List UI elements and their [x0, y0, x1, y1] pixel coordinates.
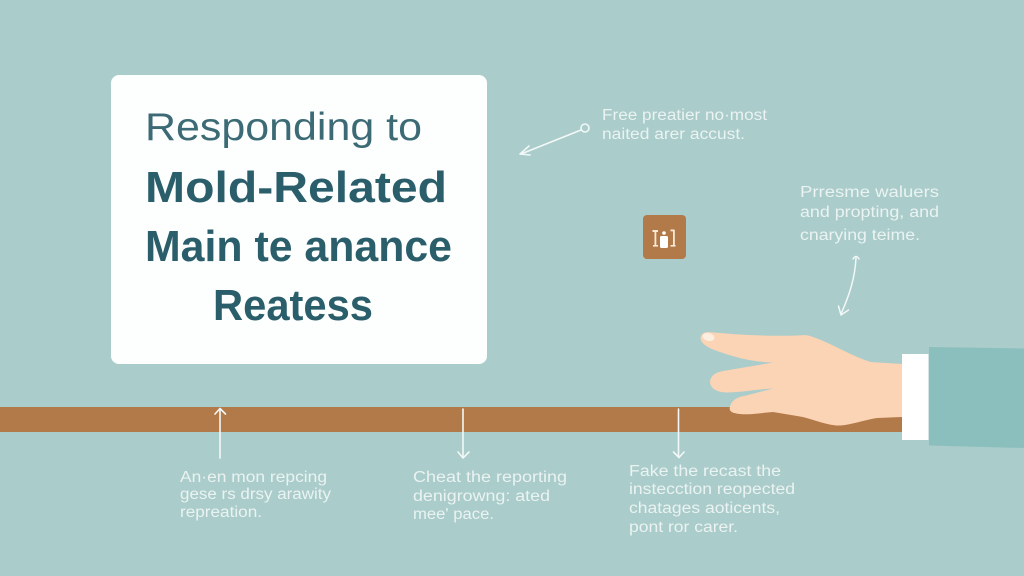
callout text	[413, 469, 567, 523]
callout: bottom middle	[413, 409, 567, 523]
arrow: down	[674, 409, 684, 458]
callout text: Prresme waluers	[800, 184, 939, 201]
callout text: and propting, and	[800, 204, 939, 221]
callout text: instecction reopected	[629, 481, 795, 498]
callout text: Free preatier no·most	[602, 107, 768, 124]
callout: bottom right	[629, 409, 795, 536]
arrow: up	[215, 408, 226, 458]
title: bold line 3: Reatess	[213, 281, 373, 330]
title: bold line 2: Main te anance	[145, 222, 452, 271]
callout text: chatages aoticents,	[629, 500, 780, 517]
callout text	[602, 107, 768, 143]
callout text: Cheat the reporting	[413, 469, 567, 486]
callout text: mee' pace.	[413, 506, 494, 523]
panel: title card	[111, 75, 487, 364]
icon: brown square with tools	[643, 215, 686, 259]
title: light line: Responding to	[145, 106, 422, 149]
arrow: down	[458, 409, 469, 458]
callout text	[180, 469, 331, 521]
illustration: hand and sleeve	[700, 332, 1024, 448]
callout text: naited arer accust.	[602, 126, 745, 143]
arrow: pointing to hand	[838, 256, 859, 315]
hand	[700, 332, 902, 426]
brown bar	[0, 407, 903, 432]
callout text	[629, 463, 795, 536]
callout text: An·en mon repcing	[180, 469, 327, 486]
callout text	[800, 184, 939, 244]
callout text: repreation.	[180, 504, 262, 521]
title: bold line 1: Mold-Related	[145, 163, 447, 212]
fingernail	[702, 332, 715, 342]
callout: right	[800, 184, 939, 315]
arrow: pointing to title card	[520, 124, 589, 155]
callout: top	[520, 107, 768, 155]
callout text: denigrowng: ated	[413, 488, 550, 505]
callout text: gese rs drsy arawity	[180, 486, 331, 503]
callout text: Fake the recast the	[629, 463, 781, 480]
callout text: cnarying teime.	[800, 227, 920, 244]
callout: bottom left	[180, 408, 331, 521]
sleeve	[929, 347, 1024, 448]
callout text: pont ror carer.	[629, 519, 738, 536]
shirt cuff	[902, 354, 928, 440]
